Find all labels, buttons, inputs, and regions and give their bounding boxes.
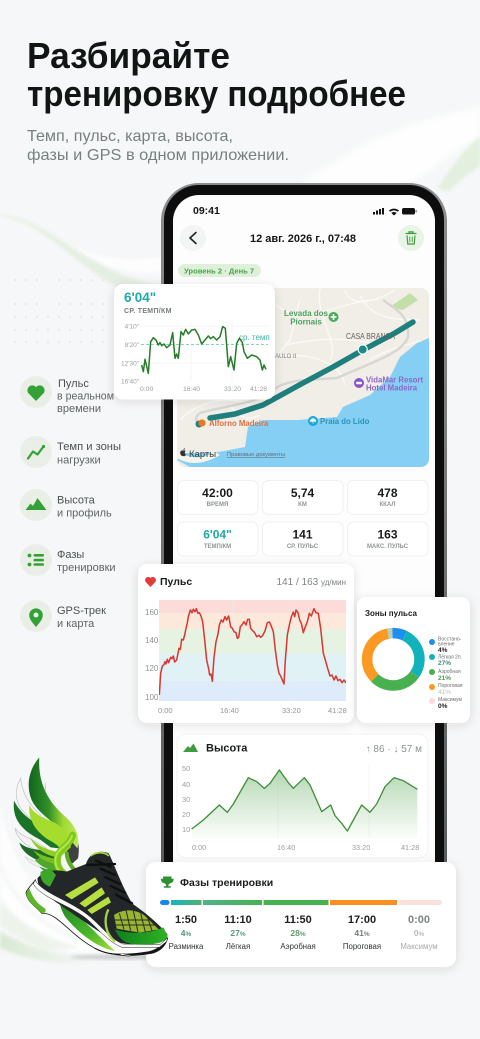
icon: heart bbox=[145, 577, 156, 587]
stat: max pulse: МАКС. ПУЛЬС bbox=[367, 544, 409, 550]
stat cards bbox=[178, 480, 428, 556]
feature: gps: и карта bbox=[57, 618, 95, 630]
altitude y axis: 40 bbox=[182, 780, 190, 789]
panel: pace chart: ср. темп bbox=[239, 333, 270, 342]
feature list bbox=[20, 376, 121, 632]
pace y axis: 12'30" bbox=[121, 360, 140, 368]
altitude y axis: 20 bbox=[182, 810, 190, 819]
feature: pulse: времени bbox=[57, 403, 101, 415]
stat: pace: 6'04" bbox=[203, 528, 232, 542]
phases heading: Фазы тренировки bbox=[180, 877, 273, 889]
pulse y axis: 140 bbox=[145, 636, 159, 645]
altitude x axis bbox=[192, 843, 419, 852]
stat: pace: ТЕМП/КМ bbox=[204, 544, 231, 550]
feature: altitude: и профиль bbox=[57, 508, 112, 520]
zones legend: 4% bbox=[438, 647, 448, 654]
feature: phases: Фазы bbox=[57, 549, 84, 561]
feature: gps: GPS-трек bbox=[57, 605, 106, 617]
stat: average pulse: 141 bbox=[292, 528, 313, 542]
altitude y axis: 50 bbox=[182, 764, 190, 773]
place: VidaMar Resort: Hotel Madeira bbox=[366, 384, 418, 392]
gps route bbox=[210, 322, 413, 418]
pulse y axis: 160 bbox=[145, 608, 159, 617]
stat: time bbox=[178, 480, 258, 514]
stat: calories: 478 bbox=[377, 486, 398, 500]
feature: pulse: Пульс bbox=[58, 378, 89, 390]
heart rate zones bbox=[159, 600, 346, 701]
stat: max pulse: 163 bbox=[377, 528, 398, 542]
icon: trophy bbox=[161, 876, 174, 888]
place: Praia do Lido: Praia do Lido bbox=[320, 417, 370, 426]
zones heading: Зоны пульса bbox=[365, 609, 418, 618]
place: Levada dos Piornais: Levada dos bbox=[284, 309, 329, 318]
place: Casa Branca: CASA BRANCA bbox=[346, 332, 396, 341]
phase: easy bbox=[224, 914, 252, 951]
phase: aerobic: 28% bbox=[290, 928, 306, 938]
panel: altitude bbox=[177, 734, 428, 858]
phase: threshold: 41% bbox=[354, 928, 370, 938]
zones legend: 0% bbox=[438, 703, 448, 710]
stat: time: 42:00 bbox=[202, 486, 233, 500]
status bar bbox=[193, 205, 417, 217]
midsole stripe bbox=[33, 880, 168, 947]
feature: gps bbox=[20, 600, 106, 632]
phase: warm-up bbox=[169, 914, 204, 951]
feature: phases bbox=[20, 544, 116, 576]
feature: phases: тренировки bbox=[57, 562, 116, 574]
zones legend: Максимум bbox=[438, 697, 462, 703]
altitude y axis bbox=[182, 764, 190, 834]
phase: maximum: Максимум bbox=[400, 942, 438, 951]
icon: mountains bbox=[183, 744, 198, 752]
shoe upper bbox=[37, 852, 167, 945]
subtitle: фазы и GPS в одном приложении. bbox=[27, 147, 289, 164]
pace x axis: 41:28 bbox=[250, 386, 267, 393]
phase: easy: 11:10 bbox=[224, 914, 252, 926]
pulse y axis: 120 bbox=[145, 664, 159, 673]
pulse x axis: 41:28 bbox=[328, 706, 347, 715]
phase: aerobic: 11:50 bbox=[284, 914, 312, 926]
pulse y axis: 100 bbox=[145, 693, 159, 702]
pulse line bbox=[159, 609, 346, 695]
subtitle bbox=[27, 128, 289, 164]
map bbox=[177, 288, 429, 467]
level pill bbox=[178, 264, 261, 277]
maps attribution: Карты bbox=[189, 449, 216, 460]
phase: warm-up: 1:50 bbox=[175, 914, 197, 926]
pulse x axis bbox=[158, 706, 347, 715]
zones legend: Лёгкая 2п. bbox=[438, 654, 462, 660]
zones legend: 41% bbox=[438, 689, 451, 696]
place: VidaMar Resort: VidaMar Resort bbox=[366, 376, 423, 384]
date heading: 12 авг. 2026 г., 07:48 bbox=[250, 233, 356, 245]
phone frame bbox=[161, 183, 447, 923]
panel: pulse chart bbox=[138, 564, 354, 723]
level pill: Уровень 2 · День 7 bbox=[184, 266, 254, 276]
feature: pulse bbox=[20, 376, 114, 415]
pace y axis: 8'20" bbox=[125, 342, 140, 349]
phase: threshold: Пороговая bbox=[343, 942, 381, 951]
feature: altitude: Высота bbox=[57, 494, 96, 506]
shoe laces bbox=[87, 861, 132, 903]
title: Разбирайте bbox=[27, 35, 230, 76]
pace x axis: 33:20 bbox=[224, 386, 241, 393]
pace x axis: 0:00 bbox=[140, 386, 153, 393]
stat: calories bbox=[348, 480, 428, 514]
pace line bbox=[142, 327, 266, 373]
stat: distance: 5,74 bbox=[291, 486, 315, 500]
shoe bbox=[26, 852, 168, 956]
shoe toe mesh bbox=[114, 910, 159, 933]
phone screen bbox=[173, 195, 435, 920]
pace x axis bbox=[140, 386, 267, 393]
panel: workout phases bbox=[146, 862, 456, 967]
altitude y axis: 10 bbox=[182, 825, 190, 834]
stat: distance bbox=[262, 480, 343, 514]
phase: maximum: 0% bbox=[414, 928, 424, 938]
stat: average pulse bbox=[262, 522, 343, 556]
pulse x axis: 33:20 bbox=[282, 706, 301, 715]
pace y axis bbox=[121, 324, 140, 386]
feature: pace: нагрузки bbox=[57, 454, 101, 466]
route marker bbox=[358, 345, 367, 354]
pace value: 6'04" bbox=[124, 290, 156, 305]
phase: maximum bbox=[400, 914, 438, 951]
shoe stripes bbox=[65, 877, 111, 914]
place: VidaMar Resort bbox=[354, 376, 423, 390]
donut chart bbox=[367, 633, 420, 686]
panel: pace chart bbox=[114, 284, 275, 400]
zones legend: вление bbox=[438, 642, 455, 648]
zones legend bbox=[429, 636, 463, 710]
place: Levada dos Piornais: Piornais bbox=[290, 318, 322, 326]
feature: pace bbox=[20, 436, 121, 468]
stat: pace bbox=[178, 522, 258, 556]
zones legend: 21% bbox=[438, 675, 451, 682]
pulse y axis bbox=[145, 608, 159, 702]
place: Levada dos Piornais bbox=[284, 310, 338, 324]
feature: pulse: в реальном bbox=[57, 390, 114, 402]
pace x axis: 16:40 bbox=[183, 386, 200, 393]
phase: aerobic bbox=[280, 914, 316, 951]
wing bbox=[14, 757, 79, 877]
zones legend: Восстано- bbox=[438, 636, 462, 642]
pulse heading: Пульс bbox=[160, 576, 192, 588]
phase: warm-up: Разминка bbox=[169, 942, 204, 951]
pace y axis: 4'10" bbox=[125, 324, 140, 330]
status bar: 09:41 bbox=[193, 205, 220, 217]
pulse summary: 141 / 163 уд/мин bbox=[276, 577, 346, 588]
altitude x axis: 33:20 bbox=[352, 843, 370, 852]
illustration: winged running shoe bbox=[14, 757, 168, 956]
altitude chart bbox=[192, 770, 417, 838]
feature: pace: Темп и зоны bbox=[57, 441, 121, 453]
altitude gain and loss: ↑ 86 · ↓ 57 м bbox=[366, 744, 422, 755]
map: AULO II bbox=[275, 354, 297, 360]
place: Alforno Madeira: Alforno Madeira bbox=[209, 419, 269, 428]
title: тренировку подробнее bbox=[27, 73, 406, 114]
zones legend: Пороговая bbox=[438, 683, 463, 689]
phase: threshold: 17:00 bbox=[348, 914, 376, 926]
panel: pulse zones bbox=[357, 597, 470, 723]
phase: threshold bbox=[343, 914, 381, 951]
altitude y axis: 30 bbox=[182, 795, 190, 804]
feature: altitude bbox=[20, 489, 112, 521]
average pace line bbox=[141, 344, 268, 346]
shoe sole bbox=[26, 880, 168, 956]
stat: calories: ККАЛ bbox=[380, 502, 395, 508]
stat: max pulse bbox=[348, 522, 428, 556]
phase: maximum: 0:00 bbox=[408, 914, 430, 926]
phases bar bbox=[160, 900, 442, 905]
stat: distance: КМ bbox=[298, 502, 307, 508]
phase: aerobic: Аэробная bbox=[280, 942, 316, 951]
maps attribution: Правовые документы bbox=[227, 452, 285, 458]
pulse x axis: 0:00 bbox=[158, 706, 173, 715]
phase: easy: 27% bbox=[230, 928, 246, 938]
zones legend: 27% bbox=[438, 660, 451, 667]
title bbox=[27, 35, 406, 114]
altitude x axis: 41:28 bbox=[401, 843, 419, 852]
back button bbox=[180, 225, 206, 251]
altitude heading: Высота bbox=[206, 742, 248, 754]
phone bbox=[161, 183, 447, 923]
phase: easy: Лёгкая bbox=[226, 942, 250, 951]
zones legend: Аэробная bbox=[438, 669, 461, 675]
phase: warm-up: 4% bbox=[181, 928, 191, 938]
pace y axis: 16'40" bbox=[121, 378, 140, 386]
altitude x axis: 0:00 bbox=[192, 843, 206, 852]
subtitle: Темп, пульс, карта, высота, bbox=[27, 128, 233, 145]
maps attribution bbox=[180, 448, 285, 460]
pulse x axis: 16:40 bbox=[220, 706, 239, 715]
delete button bbox=[398, 225, 424, 251]
pace caption: СР. ТЕМП/КМ bbox=[124, 308, 172, 315]
stat: average pulse: СР. ПУЛЬС bbox=[287, 544, 319, 550]
altitude x axis: 16:40 bbox=[277, 843, 295, 852]
stat: time: ВРЕМЯ bbox=[207, 502, 228, 508]
